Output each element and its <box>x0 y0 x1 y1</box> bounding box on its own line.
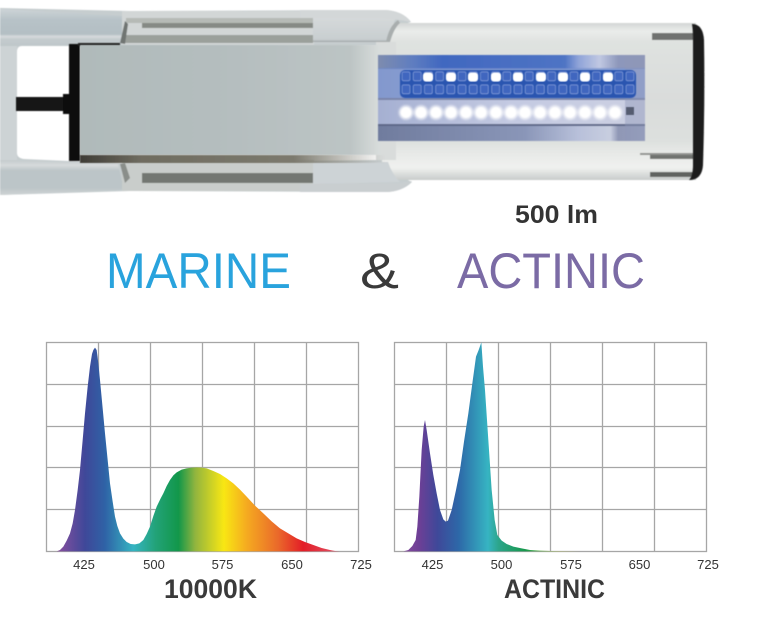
blue LED strip <box>400 70 636 98</box>
white LED row <box>399 106 634 120</box>
axis labels: 650 <box>629 557 650 572</box>
lumen label: 500 lm <box>515 201 598 229</box>
black rear bar and cord <box>16 43 120 161</box>
end cap <box>689 24 704 180</box>
top rail <box>122 11 314 45</box>
dark end details <box>652 33 694 40</box>
bottom clip <box>313 162 400 184</box>
lower arm <box>0 160 124 195</box>
chart: actinic spectrum <box>394 342 719 572</box>
body left cover <box>376 42 396 160</box>
bright upper LEDs <box>423 72 613 82</box>
heading: MARINE: MARINE <box>106 243 291 299</box>
grid lines <box>46 342 358 552</box>
lamp photo <box>0 8 704 195</box>
spectrum curve <box>57 348 340 551</box>
chart: 10000K spectrum <box>46 342 372 572</box>
spectrum curve <box>397 342 667 551</box>
dark seam under panel <box>80 155 385 163</box>
upper arm <box>0 9 125 46</box>
axis labels: 725 <box>697 557 719 572</box>
LED window <box>378 55 645 141</box>
chart title: ACTINIC: ACTINIC <box>504 574 605 604</box>
bottom rail <box>122 160 314 191</box>
axis labels: 725 <box>350 557 372 572</box>
chart title: 10000K: 10000K <box>164 574 257 604</box>
heading: ampersand: & <box>360 243 399 299</box>
axis labels <box>422 557 719 572</box>
heading: ACTINIC: ACTINIC <box>457 243 645 299</box>
lamp body <box>382 23 696 180</box>
axis labels: 500 <box>491 557 512 572</box>
axis labels: 425 <box>422 557 443 572</box>
axis labels: 575 <box>560 557 582 572</box>
left upright <box>0 46 17 160</box>
axis labels: 575 <box>212 557 233 572</box>
axis labels: 500 <box>143 557 165 572</box>
top clip <box>313 18 396 42</box>
grid lines <box>394 342 706 552</box>
lamp bracket silhouette <box>0 8 412 195</box>
centre panel <box>80 45 380 155</box>
axis labels: 650 <box>281 557 303 572</box>
axis labels: 425 <box>73 557 95 572</box>
axis labels <box>73 557 372 572</box>
